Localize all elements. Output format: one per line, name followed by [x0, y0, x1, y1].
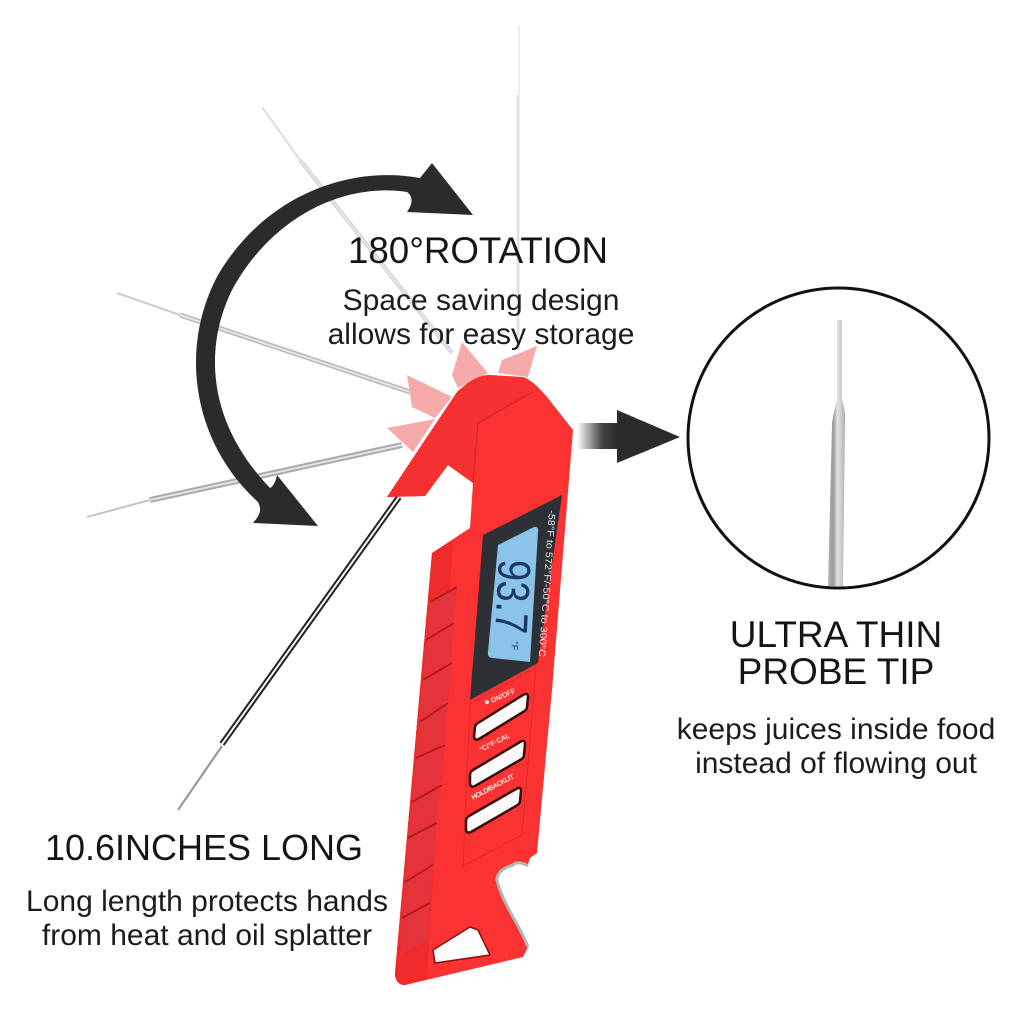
LCD reading: 93.7 [485, 558, 541, 635]
text: juices [677, 713, 995, 780]
hinge seam [473, 392, 533, 483]
heading: ultra thin probe tip: PROBE TIP [738, 651, 934, 692]
button panel outline [463, 668, 536, 866]
button labels: °C/°F·CAL [478, 731, 512, 754]
LCD screen [488, 527, 538, 662]
heading: ultra thin probe tip: ULTRA THIN [730, 614, 942, 655]
button labels: HOLD/BACKLIT [471, 773, 516, 802]
buttons [466, 694, 528, 833]
text: storage: Space saving design [343, 284, 619, 317]
text: storage: allows for easy storage [328, 318, 634, 351]
text: juices: keeps juices inside food [677, 713, 995, 746]
heading: length: 10.6INCHES LONG [45, 827, 363, 868]
hanging hole [433, 927, 490, 963]
text: hands: from heat and oil splatter [42, 919, 372, 952]
enlarged probe tip [828, 320, 845, 586]
grip ridges [402, 587, 457, 918]
text: storage [328, 284, 634, 351]
faded rotated probes [87, 25, 519, 517]
heading: 180 rotation: 180°ROTATION [348, 230, 608, 271]
rotation arrow [196, 163, 473, 526]
display bezel [470, 495, 562, 700]
text: hands [26, 885, 388, 952]
grip panels [400, 587, 457, 955]
bezel spec text: -58°F to 572°F/-50°C to 300°C [536, 510, 557, 657]
side grip strip [395, 540, 453, 985]
text: hands: Long length protects hands [26, 885, 388, 918]
bottle opener edge [497, 863, 528, 947]
text: juices: instead of flowing out [695, 747, 977, 780]
button labels [471, 688, 517, 802]
arrow to probe tip detail [577, 410, 680, 463]
heading: ultra thin probe tip [730, 614, 942, 692]
probe tip detail circle [688, 288, 989, 588]
button labels: ON/OFF [490, 688, 517, 705]
hinge shading [387, 375, 533, 497]
thermometer body [387, 375, 573, 985]
main probe [178, 497, 399, 810]
LCD unit: °F [510, 641, 520, 651]
pink hinge blades [387, 342, 537, 452]
